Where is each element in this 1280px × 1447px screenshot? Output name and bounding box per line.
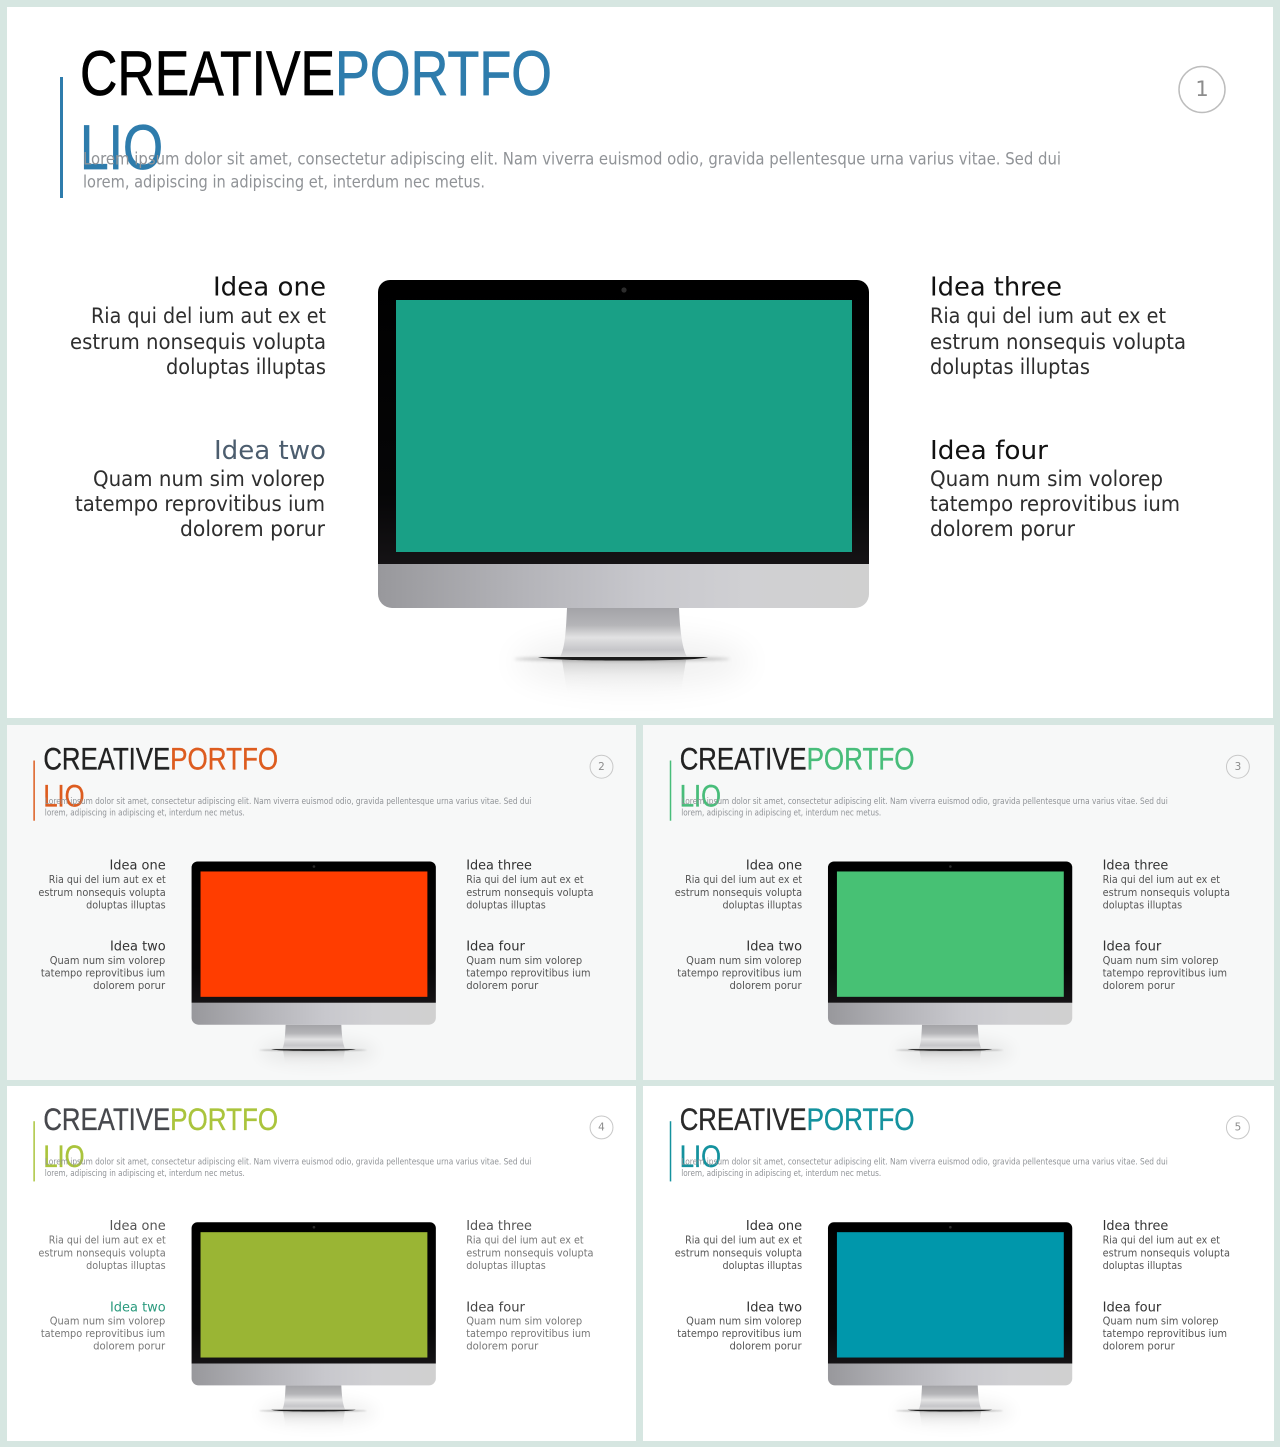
title: CREATIVE <box>43 741 170 776</box>
subtitle text: lorem, adipiscing in adipiscing et, interdum nec metus. <box>45 807 245 817</box>
title: LIO <box>43 778 85 813</box>
idea one: Idea one <box>109 858 166 873</box>
idea three: doluptas illuptas <box>1103 1259 1183 1272</box>
idea one: doluptas illuptas <box>723 898 802 911</box>
subtitle text: lorem, adipiscing in adipiscing et, interdum nec metus. <box>681 1168 881 1178</box>
subtitle text: lorem, adipiscing in adipiscing et, interdum nec metus. <box>681 807 881 817</box>
idea four <box>930 436 1180 542</box>
title: CREATIVE <box>80 39 335 109</box>
idea two <box>41 940 166 992</box>
title: PORTFO <box>807 741 915 776</box>
idea three: estrum nonsequis volupta <box>930 330 1186 355</box>
idea four: Quam num sim volorep <box>466 954 582 967</box>
idea three: Idea three <box>466 1219 532 1234</box>
idea four: Quam num sim volorep <box>1103 954 1219 967</box>
idea three: doluptas illuptas <box>466 898 546 911</box>
subtitle text: Lorem ipsum dolor sit amet, consectetur adipiscing elit. Nam viverra euismod odio, gravida pellentesque urna varius vitae. Sed dui <box>681 796 1168 806</box>
idea two: Quam num sim volorep <box>50 1315 165 1328</box>
accent bar <box>670 1121 671 1181</box>
idea three: Idea three <box>1103 1219 1168 1234</box>
idea two: Idea two <box>746 940 802 955</box>
panel: slide 4 lime <box>7 1086 636 1441</box>
idea four: Idea four <box>1103 940 1162 955</box>
accent bar <box>33 1121 35 1181</box>
panel: slide 2 orange <box>7 725 636 1080</box>
accent bar <box>60 77 63 198</box>
idea one: estrum nonsequis volupta <box>38 886 166 899</box>
monitor with lime screen <box>192 1222 436 1430</box>
idea one: Idea one <box>213 272 326 302</box>
idea one: doluptas illuptas <box>166 355 326 380</box>
subtitle text: Lorem ipsum dolor sit amet, consectetur adipiscing elit. Nam viverra euismod odio, gravida pellentesque urna varius vitae. Sed dui <box>45 1157 531 1167</box>
title: PORTFO <box>335 39 552 109</box>
title <box>680 1102 915 1174</box>
title: PORTFO <box>170 741 278 776</box>
idea two: Idea two <box>214 436 326 466</box>
idea one <box>675 1219 802 1272</box>
idea one: Ria qui del ium aut ex et <box>49 1234 166 1247</box>
monitor with blue screen <box>828 1222 1072 1430</box>
idea three: estrum nonsequis volupta <box>1103 1247 1230 1260</box>
subtitle text: Lorem ipsum dolor sit amet, consectetur adipiscing elit. Nam viverra euismod odio, gravida pellentesque urna varius vitae. Sed dui <box>83 150 1061 170</box>
subtitle text: lorem, adipiscing in adipiscing et, interdum nec metus. <box>83 172 485 192</box>
page number badge <box>1179 66 1225 112</box>
panel: slide 3 green <box>643 725 1274 1080</box>
subtitle text <box>45 796 531 817</box>
idea three <box>1103 858 1230 911</box>
idea two: tatempo reprovitibus ium <box>41 1327 165 1340</box>
title: PORTFO <box>170 1102 278 1137</box>
idea two: Idea two <box>110 940 166 955</box>
idea four <box>1103 940 1227 992</box>
panel: main slide 1 <box>7 7 1273 718</box>
idea three: Idea three <box>930 272 1062 302</box>
title: PORTFO <box>807 1102 915 1137</box>
idea four: Idea four <box>1103 1300 1162 1315</box>
idea four: Idea four <box>466 1300 526 1315</box>
idea two: Idea two <box>746 1300 802 1315</box>
idea four: dolorem porur <box>930 517 1075 542</box>
title: CREATIVE <box>43 1102 170 1137</box>
title <box>43 741 278 813</box>
idea one: Idea one <box>746 858 802 873</box>
idea one: Ria qui del ium aut ex et <box>49 873 166 886</box>
idea four: Idea four <box>930 436 1048 466</box>
idea one: Ria qui del ium aut ex et <box>685 873 802 886</box>
idea two <box>677 1300 802 1353</box>
idea one: Ria qui del ium aut ex et <box>91 304 326 329</box>
idea three: Ria qui del ium aut ex et <box>1103 873 1220 886</box>
page number badge: 1 <box>1195 77 1209 101</box>
idea one: doluptas illuptas <box>86 1259 166 1272</box>
title: LIO <box>80 113 163 183</box>
idea three <box>930 272 1186 380</box>
subtitle text: Lorem ipsum dolor sit amet, consectetur adipiscing elit. Nam viverra euismod odio, gravida pellentesque urna varius vitae. Sed dui <box>45 796 531 806</box>
idea four: Idea four <box>466 940 526 955</box>
idea two: dolorem porur <box>180 517 325 542</box>
title <box>80 39 552 183</box>
idea two <box>75 436 326 542</box>
idea one: Idea one <box>109 1219 166 1234</box>
page number badge <box>590 1116 613 1139</box>
idea four: dolorem porur <box>1103 1340 1175 1353</box>
idea one: doluptas illuptas <box>86 898 166 911</box>
idea four: Quam num sim volorep <box>930 467 1163 492</box>
title: LIO <box>680 778 721 813</box>
idea one <box>38 858 166 911</box>
idea three <box>1103 1219 1230 1272</box>
idea three: estrum nonsequis volupta <box>466 886 594 899</box>
idea four: Quam num sim volorep <box>1103 1315 1219 1328</box>
title: LIO <box>680 1139 721 1174</box>
idea three: estrum nonsequis volupta <box>466 1247 594 1260</box>
idea three <box>466 1219 594 1272</box>
idea four: dolorem porur <box>466 979 539 992</box>
idea four <box>1103 1300 1227 1353</box>
idea two: tatempo reprovitibus ium <box>677 966 802 979</box>
panel: slide 5 blue <box>643 1086 1274 1441</box>
idea three: doluptas illuptas <box>466 1259 546 1272</box>
page number badge <box>1226 755 1249 778</box>
idea two: dolorem porur <box>729 979 802 992</box>
idea three: estrum nonsequis volupta <box>1103 886 1230 899</box>
idea four: tatempo reprovitibus ium <box>466 1327 591 1340</box>
page number badge: 5 <box>1235 1122 1241 1134</box>
page number badge: 3 <box>1235 761 1241 773</box>
idea three: Idea three <box>1103 858 1168 873</box>
subtitle text <box>83 150 1061 192</box>
idea two: Quam num sim volorep <box>686 954 802 967</box>
idea three <box>466 858 594 911</box>
idea two <box>677 940 802 992</box>
accent bar <box>33 761 35 821</box>
accent bar <box>670 761 671 821</box>
idea four: tatempo reprovitibus ium <box>930 492 1180 517</box>
page number badge <box>1226 1116 1249 1139</box>
idea three: Ria qui del ium aut ex et <box>930 304 1166 329</box>
idea one: Idea one <box>746 1219 802 1234</box>
idea two: tatempo reprovitibus ium <box>75 492 325 517</box>
idea two: dolorem porur <box>93 979 166 992</box>
idea three: doluptas illuptas <box>930 355 1090 380</box>
idea one: Ria qui del ium aut ex et <box>685 1234 802 1247</box>
idea four: tatempo reprovitibus ium <box>1103 1327 1227 1340</box>
idea three: Ria qui del ium aut ex et <box>1103 1234 1220 1247</box>
idea one <box>675 858 802 911</box>
idea three: Idea three <box>466 858 532 873</box>
idea two: Idea two <box>110 1300 166 1315</box>
subtitle text <box>45 1157 531 1178</box>
subtitle text: Lorem ipsum dolor sit amet, consectetur adipiscing elit. Nam viverra euismod odio, gravida pellentesque urna varius vitae. Sed dui <box>681 1157 1168 1167</box>
idea four <box>466 1300 591 1353</box>
idea two: tatempo reprovitibus ium <box>677 1327 802 1340</box>
idea four: Quam num sim volorep <box>466 1315 582 1328</box>
title <box>43 1102 278 1174</box>
monitor with orange screen <box>192 862 436 1069</box>
title: CREATIVE <box>680 1102 807 1137</box>
idea two: dolorem porur <box>93 1340 166 1353</box>
monitor with green screen <box>828 862 1072 1069</box>
idea one <box>38 1219 166 1272</box>
idea three: Ria qui del ium aut ex et <box>466 873 584 886</box>
idea one <box>70 272 326 380</box>
idea two: Quam num sim volorep <box>93 467 325 492</box>
subtitle text: lorem, adipiscing in adipiscing et, interdum nec metus. <box>45 1168 245 1178</box>
subtitle text <box>681 1157 1168 1178</box>
idea two: Quam num sim volorep <box>50 954 165 967</box>
title <box>680 741 915 813</box>
idea four: tatempo reprovitibus ium <box>466 966 591 979</box>
idea two: tatempo reprovitibus ium <box>41 966 165 979</box>
idea two: dolorem porur <box>729 1340 802 1353</box>
title: CREATIVE <box>680 741 807 776</box>
idea one: estrum nonsequis volupta <box>70 330 326 355</box>
page number badge: 4 <box>598 1122 605 1134</box>
idea four: tatempo reprovitibus ium <box>1103 966 1227 979</box>
idea four <box>466 940 591 992</box>
idea two <box>41 1300 166 1353</box>
idea two: Quam num sim volorep <box>686 1315 802 1328</box>
idea three: Ria qui del ium aut ex et <box>466 1234 584 1247</box>
idea one: estrum nonsequis volupta <box>675 1247 802 1260</box>
page number badge: 2 <box>598 761 605 773</box>
idea three: doluptas illuptas <box>1103 898 1183 911</box>
subtitle text <box>681 796 1168 817</box>
page number badge <box>590 755 613 778</box>
idea four: dolorem porur <box>1103 979 1175 992</box>
monitor with teal screen <box>378 280 869 698</box>
idea four: dolorem porur <box>466 1340 539 1353</box>
idea one: estrum nonsequis volupta <box>38 1247 166 1260</box>
idea one: doluptas illuptas <box>723 1259 802 1272</box>
title: LIO <box>43 1139 85 1174</box>
idea one: estrum nonsequis volupta <box>675 886 802 899</box>
